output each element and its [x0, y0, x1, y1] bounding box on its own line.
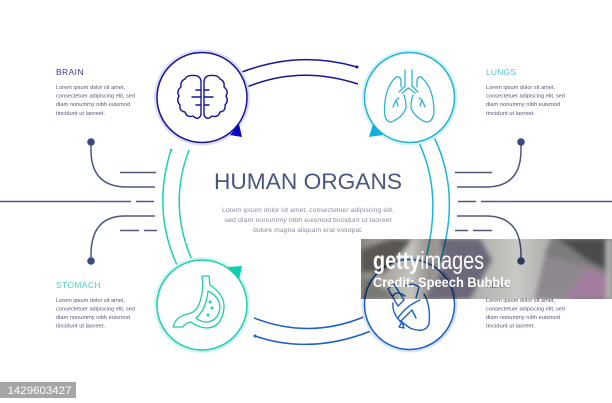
title: HUMAN ORGANS	[214, 169, 402, 194]
node: stomach	[156, 259, 248, 351]
text block: stomach	[56, 280, 135, 330]
text block: heart: tincidunt ut laoreet.	[486, 324, 535, 330]
node: brain	[156, 52, 248, 144]
arrow arcs: brain to lungs	[242, 60, 358, 87]
text block: lungs: diam nonummy nibh euismod	[486, 102, 560, 108]
text block: heart: diam nonummy nibh euismod	[486, 315, 560, 321]
text block: lungs: LUNGS	[486, 67, 516, 77]
text block: heart: HEART	[486, 281, 512, 290]
text block: brain: Lorem ipsum dolor sit amet,	[56, 85, 125, 91]
text block: heart	[486, 281, 565, 330]
node: lungs	[364, 52, 456, 144]
text block: stomach: tincidunt ut laoreet.	[56, 324, 105, 330]
center paragraph	[222, 207, 394, 234]
icon: heart	[388, 284, 429, 330]
text block: lungs	[486, 67, 565, 117]
text block: stomach: consectetuer adipiscing elit, sed	[56, 306, 135, 312]
text block: lungs: consectetuer adipiscing elit, sed	[486, 94, 565, 100]
text block: brain: diam nonummy nibh euismod	[56, 102, 130, 108]
center paragraph: dolore magna aliquam erat volutpat.	[253, 227, 363, 234]
arrow arcs: stomach to brain	[163, 149, 192, 265]
icon: brain	[178, 75, 227, 118]
arrow arcs: lungs to heart	[419, 137, 449, 265]
text block: stomach: diam nonummy nibh euismod	[56, 315, 130, 321]
watermark logo text: gettyimages	[373, 247, 484, 275]
image id tag	[0, 382, 76, 398]
arrow arcs: heart to stomach	[254, 316, 371, 344]
watermark banner	[361, 239, 612, 299]
icon: lungs	[384, 70, 434, 122]
icon: stomach	[173, 276, 224, 328]
text block: lungs: Lorem ipsum dolor sit amet,	[486, 85, 555, 91]
text block: brain: consectetuer adipiscing elit, sed	[56, 94, 135, 100]
text block: lungs: tincidunt ut laoreet.	[486, 111, 535, 117]
text block: heart: Lorem ipsum dolor sit amet,	[486, 298, 555, 304]
center paragraph: sed diam nonummy nibh euismod tincidunt ut laoreet	[224, 217, 392, 224]
text block: brain: tincidunt ut laoreet.	[56, 111, 105, 117]
center paragraph: Lorem ipsum dolor sit amet, consectetuer adipiscing elit,	[222, 207, 394, 214]
text block: brain: BRAIN	[56, 67, 84, 77]
text block: stomach: Lorem ipsum dolor sit amet,	[56, 298, 125, 304]
image id tag: 1429603427	[8, 385, 72, 397]
connector lines: left	[0, 138, 157, 265]
text block: heart: consectetuer adipiscing elit, sed	[486, 306, 565, 312]
node: heart	[364, 258, 456, 350]
text block: stomach: STOMACH	[56, 280, 100, 290]
connector lines: right	[455, 138, 612, 265]
watermark credit text: Credit: Speech Bubble	[373, 275, 511, 290]
text block: brain	[56, 67, 135, 117]
